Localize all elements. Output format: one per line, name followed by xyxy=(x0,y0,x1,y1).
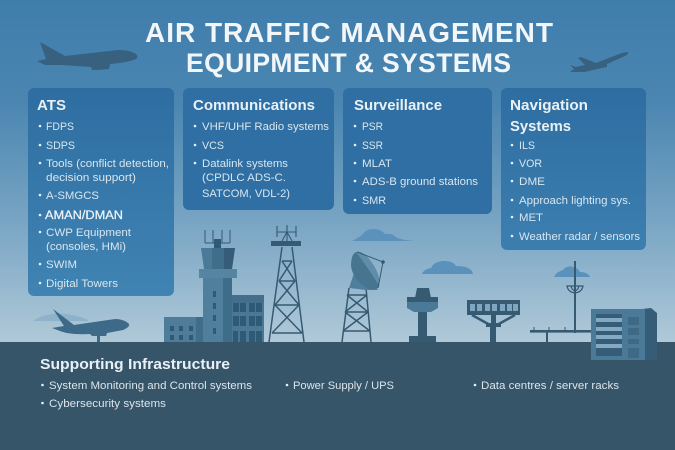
cloud behind plane xyxy=(33,314,88,321)
title: AIR TRAFFIC MANAGEMENT xyxy=(145,17,553,48)
heading: Supporting Infrastructure: Supporting Infrastructure xyxy=(40,357,230,373)
list: Navigation items: MET xyxy=(519,212,543,224)
list: ATS items: SWIM xyxy=(46,259,77,271)
icon: airplane top left xyxy=(37,42,138,70)
tower shaft xyxy=(203,278,232,343)
list: Navigation items xyxy=(511,140,640,243)
list: ATS items: FDPS xyxy=(46,121,74,133)
list: supporting items xyxy=(41,380,619,410)
cloud centre xyxy=(422,261,473,274)
icon: server building xyxy=(591,308,657,360)
list: Communications items: Datalink systems xyxy=(202,158,288,170)
list: supporting items: Power Supply / UPS xyxy=(293,380,394,392)
list: ATS items xyxy=(39,121,169,290)
list: Communications items xyxy=(194,121,329,200)
list: Surveillance items: SMR xyxy=(362,195,386,207)
list: ATS items: CWP Equipment xyxy=(46,227,132,239)
list: Surveillance items: MLAT xyxy=(362,158,392,170)
ground band xyxy=(0,342,675,450)
list: Navigation items: VOR xyxy=(519,158,542,170)
list: Navigation items: ILS xyxy=(519,140,535,152)
list: ATS items: AMAN/DMAN xyxy=(45,210,123,222)
list: Surveillance items: PSR xyxy=(362,121,383,133)
icon: control tower with buildings xyxy=(164,230,264,343)
list: ATS items: Digital Towers xyxy=(46,278,118,290)
heading: Navigation Systems: Navigation xyxy=(510,98,588,114)
heading: ATS: ATS xyxy=(37,98,66,114)
icon: approach lighting mast xyxy=(530,261,592,343)
list: supporting items: Data centres / server racks xyxy=(481,380,619,392)
icon: radar dish xyxy=(342,252,385,342)
panel: Communications xyxy=(183,88,334,210)
heading: Navigation Systems: Systems xyxy=(510,119,571,135)
title: EQUIPMENT & SYSTEMS xyxy=(186,48,511,78)
panel: Navigation Systems xyxy=(501,88,646,250)
heading: Navigation Systems xyxy=(510,98,588,135)
list: ATS items: Tools (conflict detection, xyxy=(46,158,169,170)
list: Navigation items: DME xyxy=(519,176,545,188)
panel: Supporting Infrastructure xyxy=(40,357,619,410)
cloud right xyxy=(554,266,590,277)
title xyxy=(145,17,553,78)
panel: Surveillance xyxy=(343,88,492,214)
list: Surveillance items xyxy=(354,121,478,207)
list: ATS items: (consoles, HMi) xyxy=(46,241,126,253)
icon: airplane top right xyxy=(570,52,628,72)
icon: radar array antenna xyxy=(467,300,520,343)
list: Communications items: VCS xyxy=(202,140,224,152)
tower antenna xyxy=(205,230,230,243)
list: ATS items: SDPS xyxy=(46,140,75,152)
list: Surveillance items: SSR xyxy=(362,140,383,152)
tower balcony xyxy=(199,269,237,278)
heading: Communications: Communications xyxy=(193,98,315,114)
right building xyxy=(232,295,264,343)
list: Communications items: SATCOM, VDL-2) xyxy=(202,188,290,200)
icon: small control tower xyxy=(407,288,438,343)
list: ATS items: decision support) xyxy=(46,172,136,184)
list: ATS items: A-SMGCS xyxy=(46,190,99,202)
icon: lattice radio tower xyxy=(269,225,304,342)
cloud near dish xyxy=(352,229,415,241)
low building xyxy=(164,317,203,343)
list: Communications items: VHF/UHF Radio systems xyxy=(202,121,329,133)
list: supporting items: System Monitoring and Control systems xyxy=(49,380,252,392)
panel: ATS xyxy=(28,88,174,296)
list: Surveillance items: ADS-B ground stations xyxy=(362,176,478,188)
list: supporting items: Cybersecurity systems xyxy=(49,398,166,410)
sky background xyxy=(0,0,675,343)
tower cab xyxy=(201,248,235,269)
icon: airplane on ground xyxy=(52,309,129,343)
list: Navigation items: Approach lighting sys. xyxy=(519,195,631,207)
heading: Surveillance: Surveillance xyxy=(354,98,442,114)
list: Communications items: (CPDLC ADS-C. xyxy=(202,172,286,184)
list: Navigation items: Weather radar / sensors xyxy=(519,231,640,243)
